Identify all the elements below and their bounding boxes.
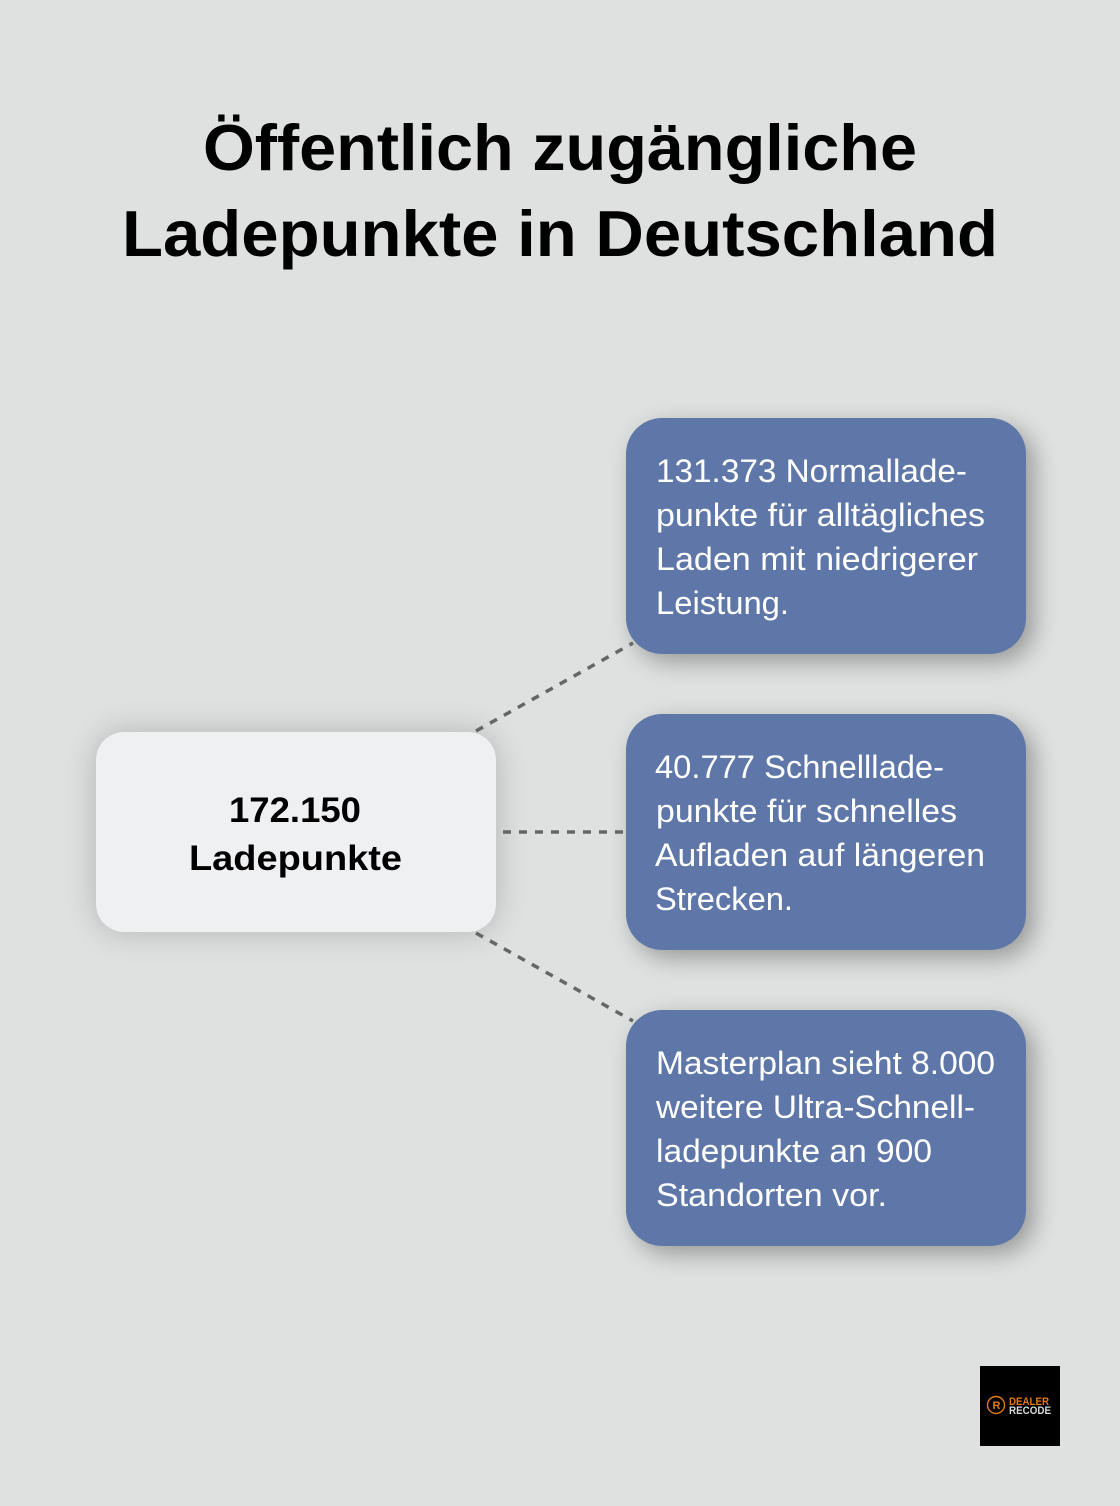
title: Ladepunkte in Deutschland [122,197,998,270]
panel: fast charging points [626,714,1026,950]
panel: total charging points: 172.150 [229,791,361,830]
title [122,111,998,270]
panel: total charging points [96,732,496,932]
panel: masterplan ultra-fast charging points: Masterplan sieht 8.000 [656,1045,995,1081]
panel: masterplan ultra-fast charging points: ladepunkte an 900 [656,1133,932,1169]
logo: Dealer Recode: R [992,1400,1000,1412]
panel: fast charging points: punkte für schnelles [656,793,957,829]
panel: fast charging points: Strecken. [655,881,793,917]
panel: normal charging points [626,418,1026,654]
panel: masterplan ultra-fast charging points: Standorten vor. [656,1177,887,1213]
logo: Dealer Recode: RECODE [1009,1405,1051,1417]
title: Öffentlich zugängliche [203,111,917,184]
panel: masterplan ultra-fast charging points [626,1010,1026,1246]
logo: Dealer Recode [980,1366,1060,1446]
panel: fast charging points: Aufladen auf längeren [655,837,985,873]
logo: Dealer Recode: DEALER [1009,1396,1049,1408]
panel: normal charging points: Leistung. [656,585,789,621]
panel: masterplan ultra-fast charging points: weitere Ultra-Schnell- [655,1089,975,1125]
panel: fast charging points: 40.777 Schnelllade- [655,749,944,785]
panel: normal charging points: punkte für alltägliches [656,497,985,533]
panel: total charging points: Ladepunkte [189,839,402,878]
panel: normal charging points: Laden mit niedrigerer [656,541,978,577]
panel: normal charging points: 131.373 Normallade- [656,453,967,489]
